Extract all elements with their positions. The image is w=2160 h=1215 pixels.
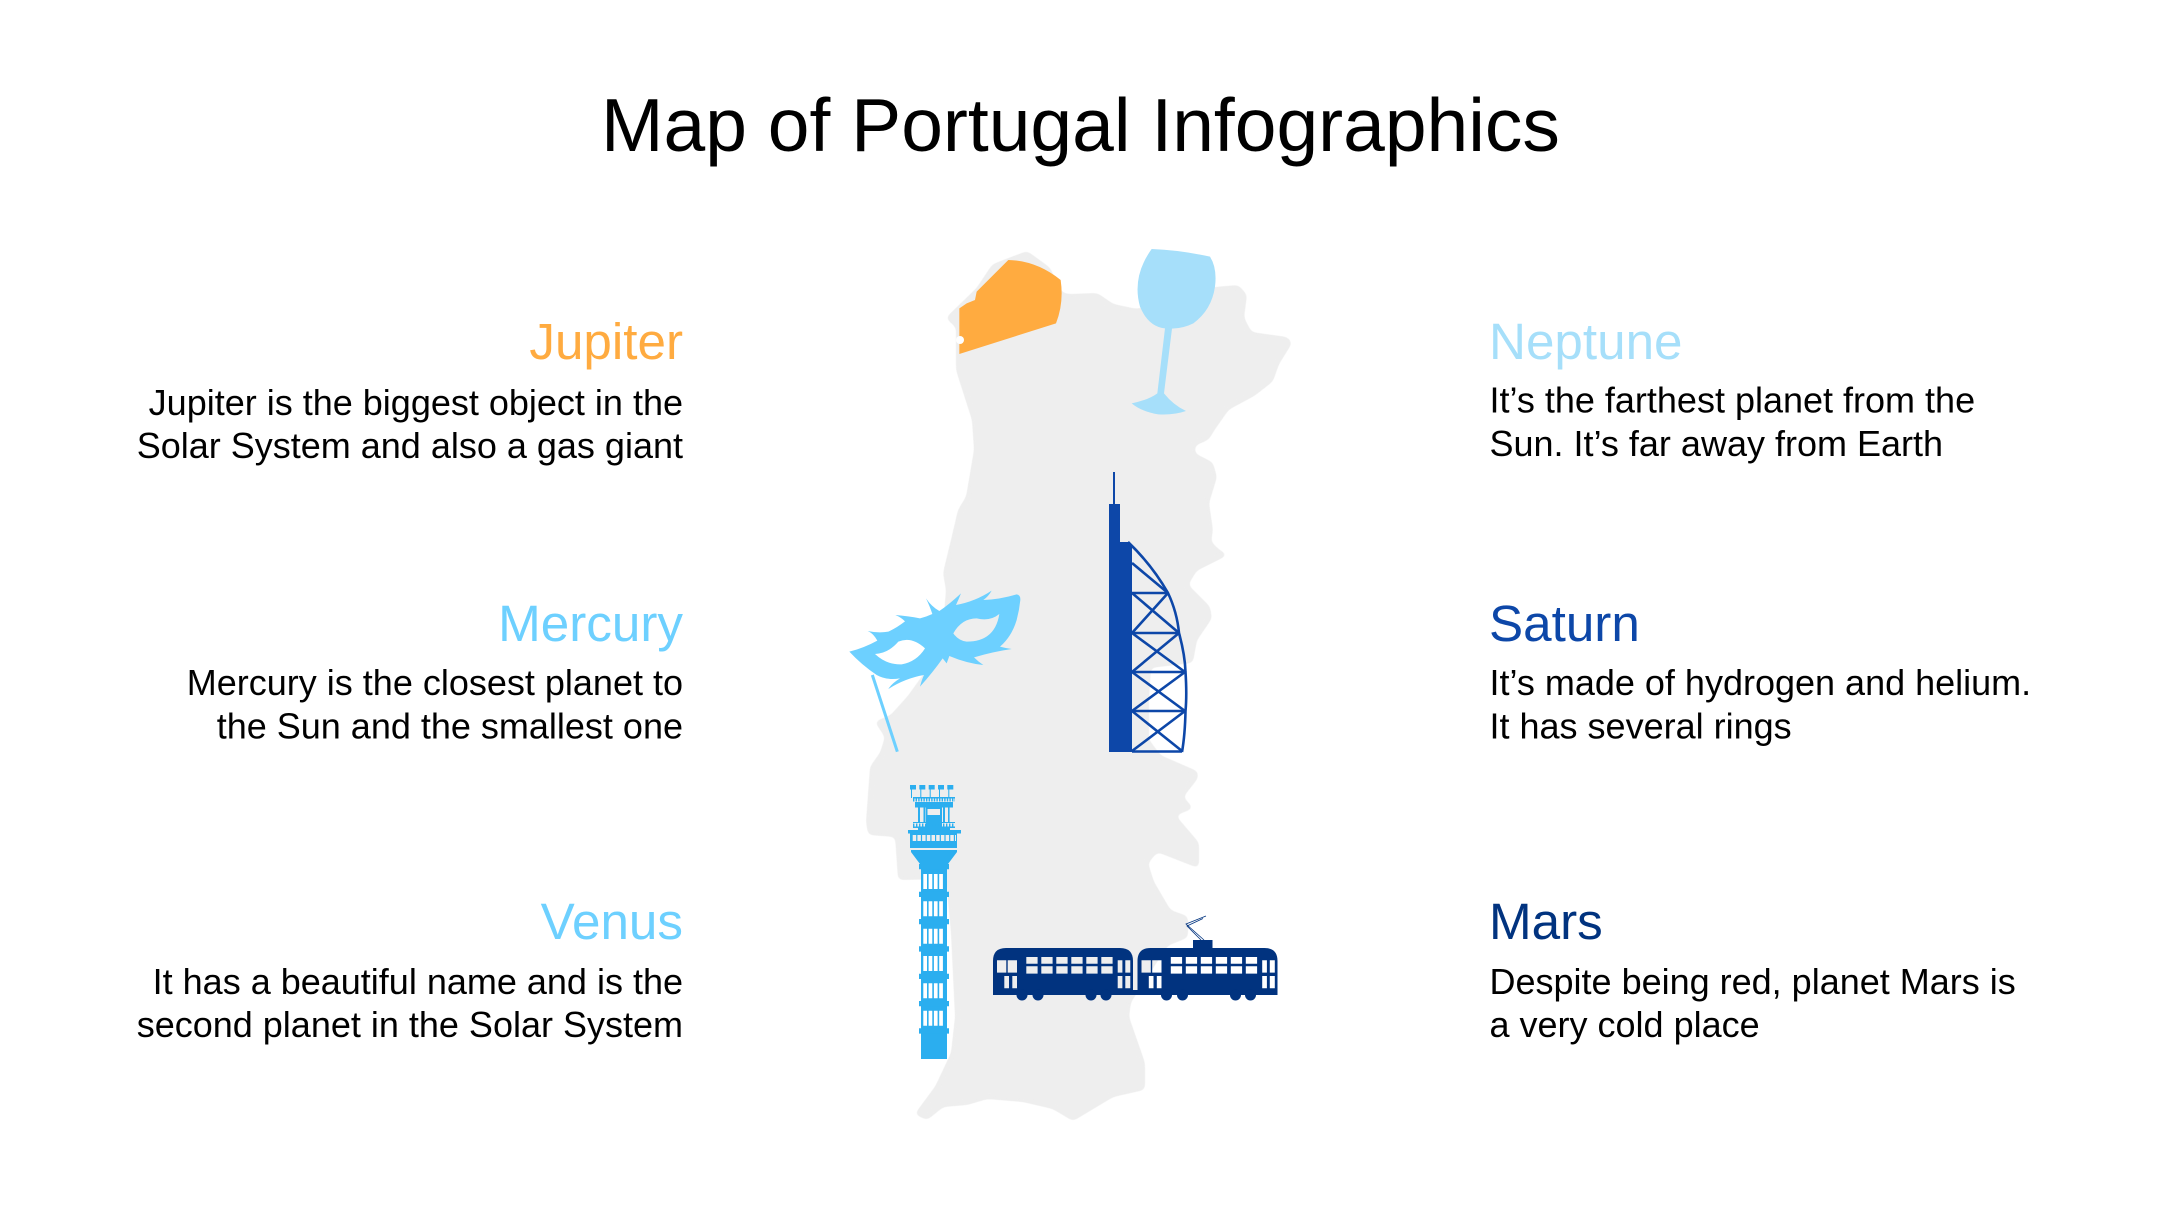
text: Jupiter description: Solar System and also a gas giant xyxy=(137,425,683,466)
heading: Jupiter: Jupiter xyxy=(529,313,683,370)
text: Mars description: Despite being red, planet Mars is xyxy=(1490,961,2016,1002)
icon: tower building xyxy=(1109,472,1186,752)
text: Saturn description: It’s made of hydrogen and helium. xyxy=(1490,662,2031,703)
text: Mars description: a very cold place xyxy=(1490,1004,1760,1045)
text: Mercury description: Mercury is the closest planet to xyxy=(187,662,683,703)
heading: Mercury: Mercury xyxy=(498,595,683,652)
icon: carnival mask xyxy=(849,591,1020,752)
panel: Neptune xyxy=(1489,313,1975,464)
heading: Saturn: Saturn xyxy=(1489,595,1640,652)
text: Neptune description xyxy=(1490,380,1975,464)
text: Venus description: It has a beautiful name and is the xyxy=(153,961,683,1002)
heading: Neptune: Neptune xyxy=(1489,313,1683,370)
icon: lighthouse tower xyxy=(908,785,961,1059)
text: Saturn description: It has several rings xyxy=(1490,706,1792,746)
panel: Venus xyxy=(137,893,683,1045)
text: Neptune description: It’s the farthest planet from the xyxy=(1490,380,1975,420)
text: Saturn description xyxy=(1490,662,2031,746)
panel: Jupiter xyxy=(137,313,683,466)
panel: Mercury xyxy=(187,595,683,746)
title: Map of Portugal Infographics xyxy=(601,83,1560,167)
text: Mercury description: the Sun and the smallest one xyxy=(217,706,683,746)
map of Portugal xyxy=(867,252,1291,1120)
icon: cheese xyxy=(956,260,1062,354)
text: Venus description xyxy=(137,961,683,1045)
text: Jupiter description: Jupiter is the biggest object in the xyxy=(149,382,683,423)
text: Jupiter description xyxy=(137,382,683,466)
heading: Mars: Mars xyxy=(1489,893,1603,950)
text: Mercury description xyxy=(187,662,683,746)
icon: wine glass xyxy=(1132,249,1216,415)
text: Venus description: second planet in the Solar System xyxy=(137,1004,683,1045)
heading: Venus: Venus xyxy=(541,893,683,950)
text: Neptune description: Sun. It’s far away from Earth xyxy=(1490,423,1943,464)
panel: Mars xyxy=(1489,893,2016,1045)
icon: tram xyxy=(993,916,1278,1000)
text: Mars description xyxy=(1490,961,2016,1045)
panel: Saturn xyxy=(1489,595,2031,746)
